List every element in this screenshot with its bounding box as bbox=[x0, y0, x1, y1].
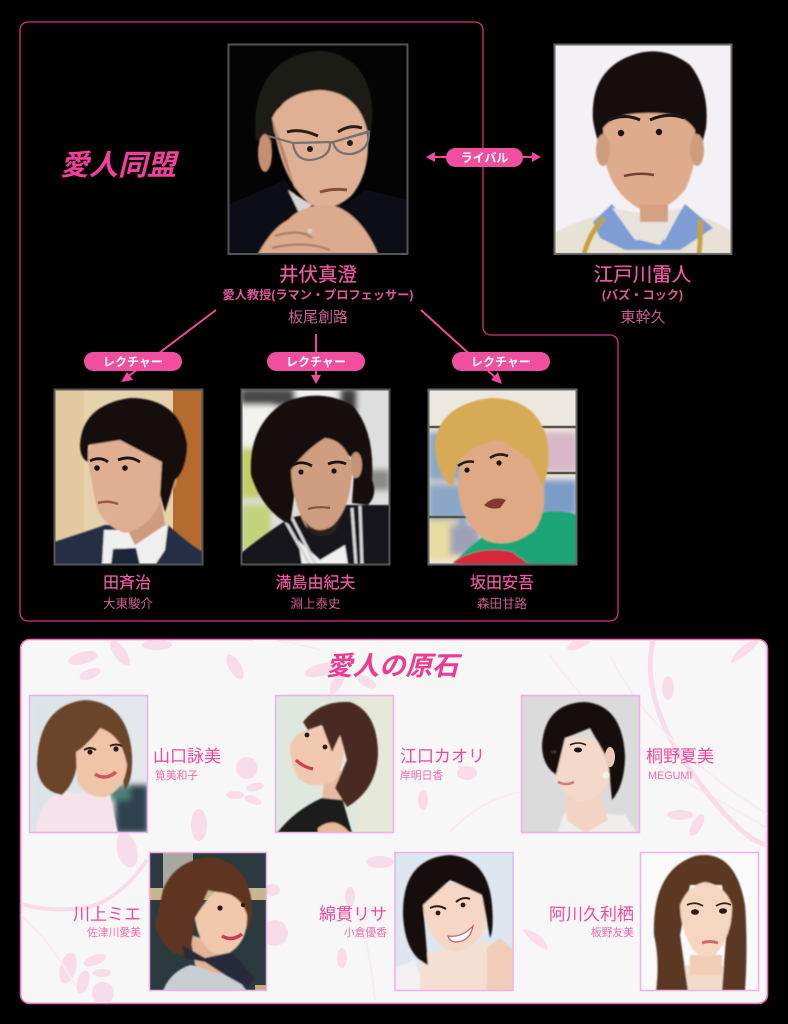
text: 川上ミエ bbox=[73, 905, 141, 939]
text: 坂田安吾 credits: 坂田安吾 bbox=[470, 574, 534, 592]
portrait: 井伏真澄 bbox=[228, 44, 408, 254]
text: 江戸川雷人 credits: 江戸川雷人 bbox=[594, 264, 691, 286]
text: 井伏真澄 credits: 井伏真澄 bbox=[279, 264, 357, 286]
text: 井伏真澄 credits: 板尾創路 bbox=[288, 309, 348, 326]
text: 阿川久利栖 bbox=[549, 905, 634, 939]
text: 綿貫リサ: 綿貫リサ bbox=[319, 905, 387, 924]
arrow: lecture left bbox=[84, 310, 216, 382]
text: 川上ミエ: 佐津川愛美 bbox=[87, 925, 141, 939]
text: 江戸川雷人 credits: (バズ・コック) bbox=[602, 287, 683, 302]
text: 桐野夏美: 桐野夏美 bbox=[646, 747, 714, 766]
text: 桐野夏美 bbox=[646, 747, 714, 782]
portrait: 阿川久利栖 bbox=[652, 854, 748, 990]
text: 江口カオリ bbox=[400, 747, 485, 782]
text: 田斉治 credits: 大東駿介 bbox=[103, 597, 153, 611]
text: 井伏真澄 credits bbox=[223, 264, 413, 326]
label: レクチャー: レクチャー bbox=[286, 355, 346, 369]
heading: 愛人同盟: 愛人同盟 bbox=[60, 150, 180, 182]
arrow: lecture centre bbox=[267, 334, 365, 384]
text: 綿貫リサ bbox=[319, 905, 387, 939]
text: 阿川久利栖: 板野友美 bbox=[591, 925, 634, 939]
label: ライバル: ライバル bbox=[461, 151, 508, 165]
arrow: rival bbox=[426, 148, 541, 167]
text: 山口詠美 bbox=[153, 747, 221, 782]
text: 江戸川雷人 credits bbox=[594, 264, 691, 326]
text: 満島由紀夫 credits bbox=[275, 574, 356, 611]
text: 満島由紀夫 credits: 淵上泰史 bbox=[290, 597, 341, 611]
portrait: 川上ミエ bbox=[149, 852, 267, 991]
label: レクチャー: レクチャー bbox=[103, 355, 163, 369]
text: 田斉治 credits bbox=[103, 574, 153, 611]
text: 江戸川雷人 credits: 東幹久 bbox=[620, 309, 666, 326]
text: 阿川久利栖: 阿川久利栖 bbox=[549, 905, 634, 924]
arrow: lecture right bbox=[421, 310, 550, 384]
text: 桐野夏美: MEGUMI bbox=[648, 770, 692, 782]
portrait: 桐野夏美 bbox=[521, 695, 640, 833]
portrait: 山口詠美 bbox=[29, 695, 148, 833]
portrait: 坂田安吾 bbox=[428, 389, 577, 565]
floral background bbox=[20, 633, 772, 1004]
portrait: 綿貫リサ bbox=[395, 852, 513, 991]
text: 山口詠美: 筧美和子 bbox=[155, 768, 198, 782]
text: 田斉治 credits: 田斉治 bbox=[103, 574, 151, 592]
portrait: 江口カオリ bbox=[275, 695, 394, 833]
text: 江口カオリ: 岸明日香 bbox=[400, 769, 443, 782]
text: 川上ミエ: 川上ミエ bbox=[73, 905, 141, 924]
text: 坂田安吾 credits: 森田甘路 bbox=[477, 596, 527, 611]
portrait: 江戸川雷人 bbox=[554, 44, 732, 254]
panel: 愛人同盟 outline bbox=[20, 22, 618, 621]
portrait: 満島由紀夫 bbox=[241, 389, 390, 565]
label: レクチャー: レクチャー bbox=[471, 355, 531, 369]
text: 山口詠美: 山口詠美 bbox=[153, 747, 221, 766]
text: 江口カオリ: 江口カオリ bbox=[400, 747, 485, 766]
text: 井伏真澄 credits: 愛人教授(ラマン・プロフェッサー) bbox=[223, 287, 413, 302]
text: 綿貫リサ: 小倉優香 bbox=[344, 926, 387, 939]
portrait: 田斉治 bbox=[54, 389, 203, 565]
text: 坂田安吾 credits bbox=[470, 574, 534, 611]
panel: 愛人の原石 bbox=[20, 640, 768, 1004]
text: 満島由紀夫 credits: 満島由紀夫 bbox=[275, 574, 356, 592]
heading: 愛人の原石: 愛人の原石 bbox=[326, 651, 463, 681]
